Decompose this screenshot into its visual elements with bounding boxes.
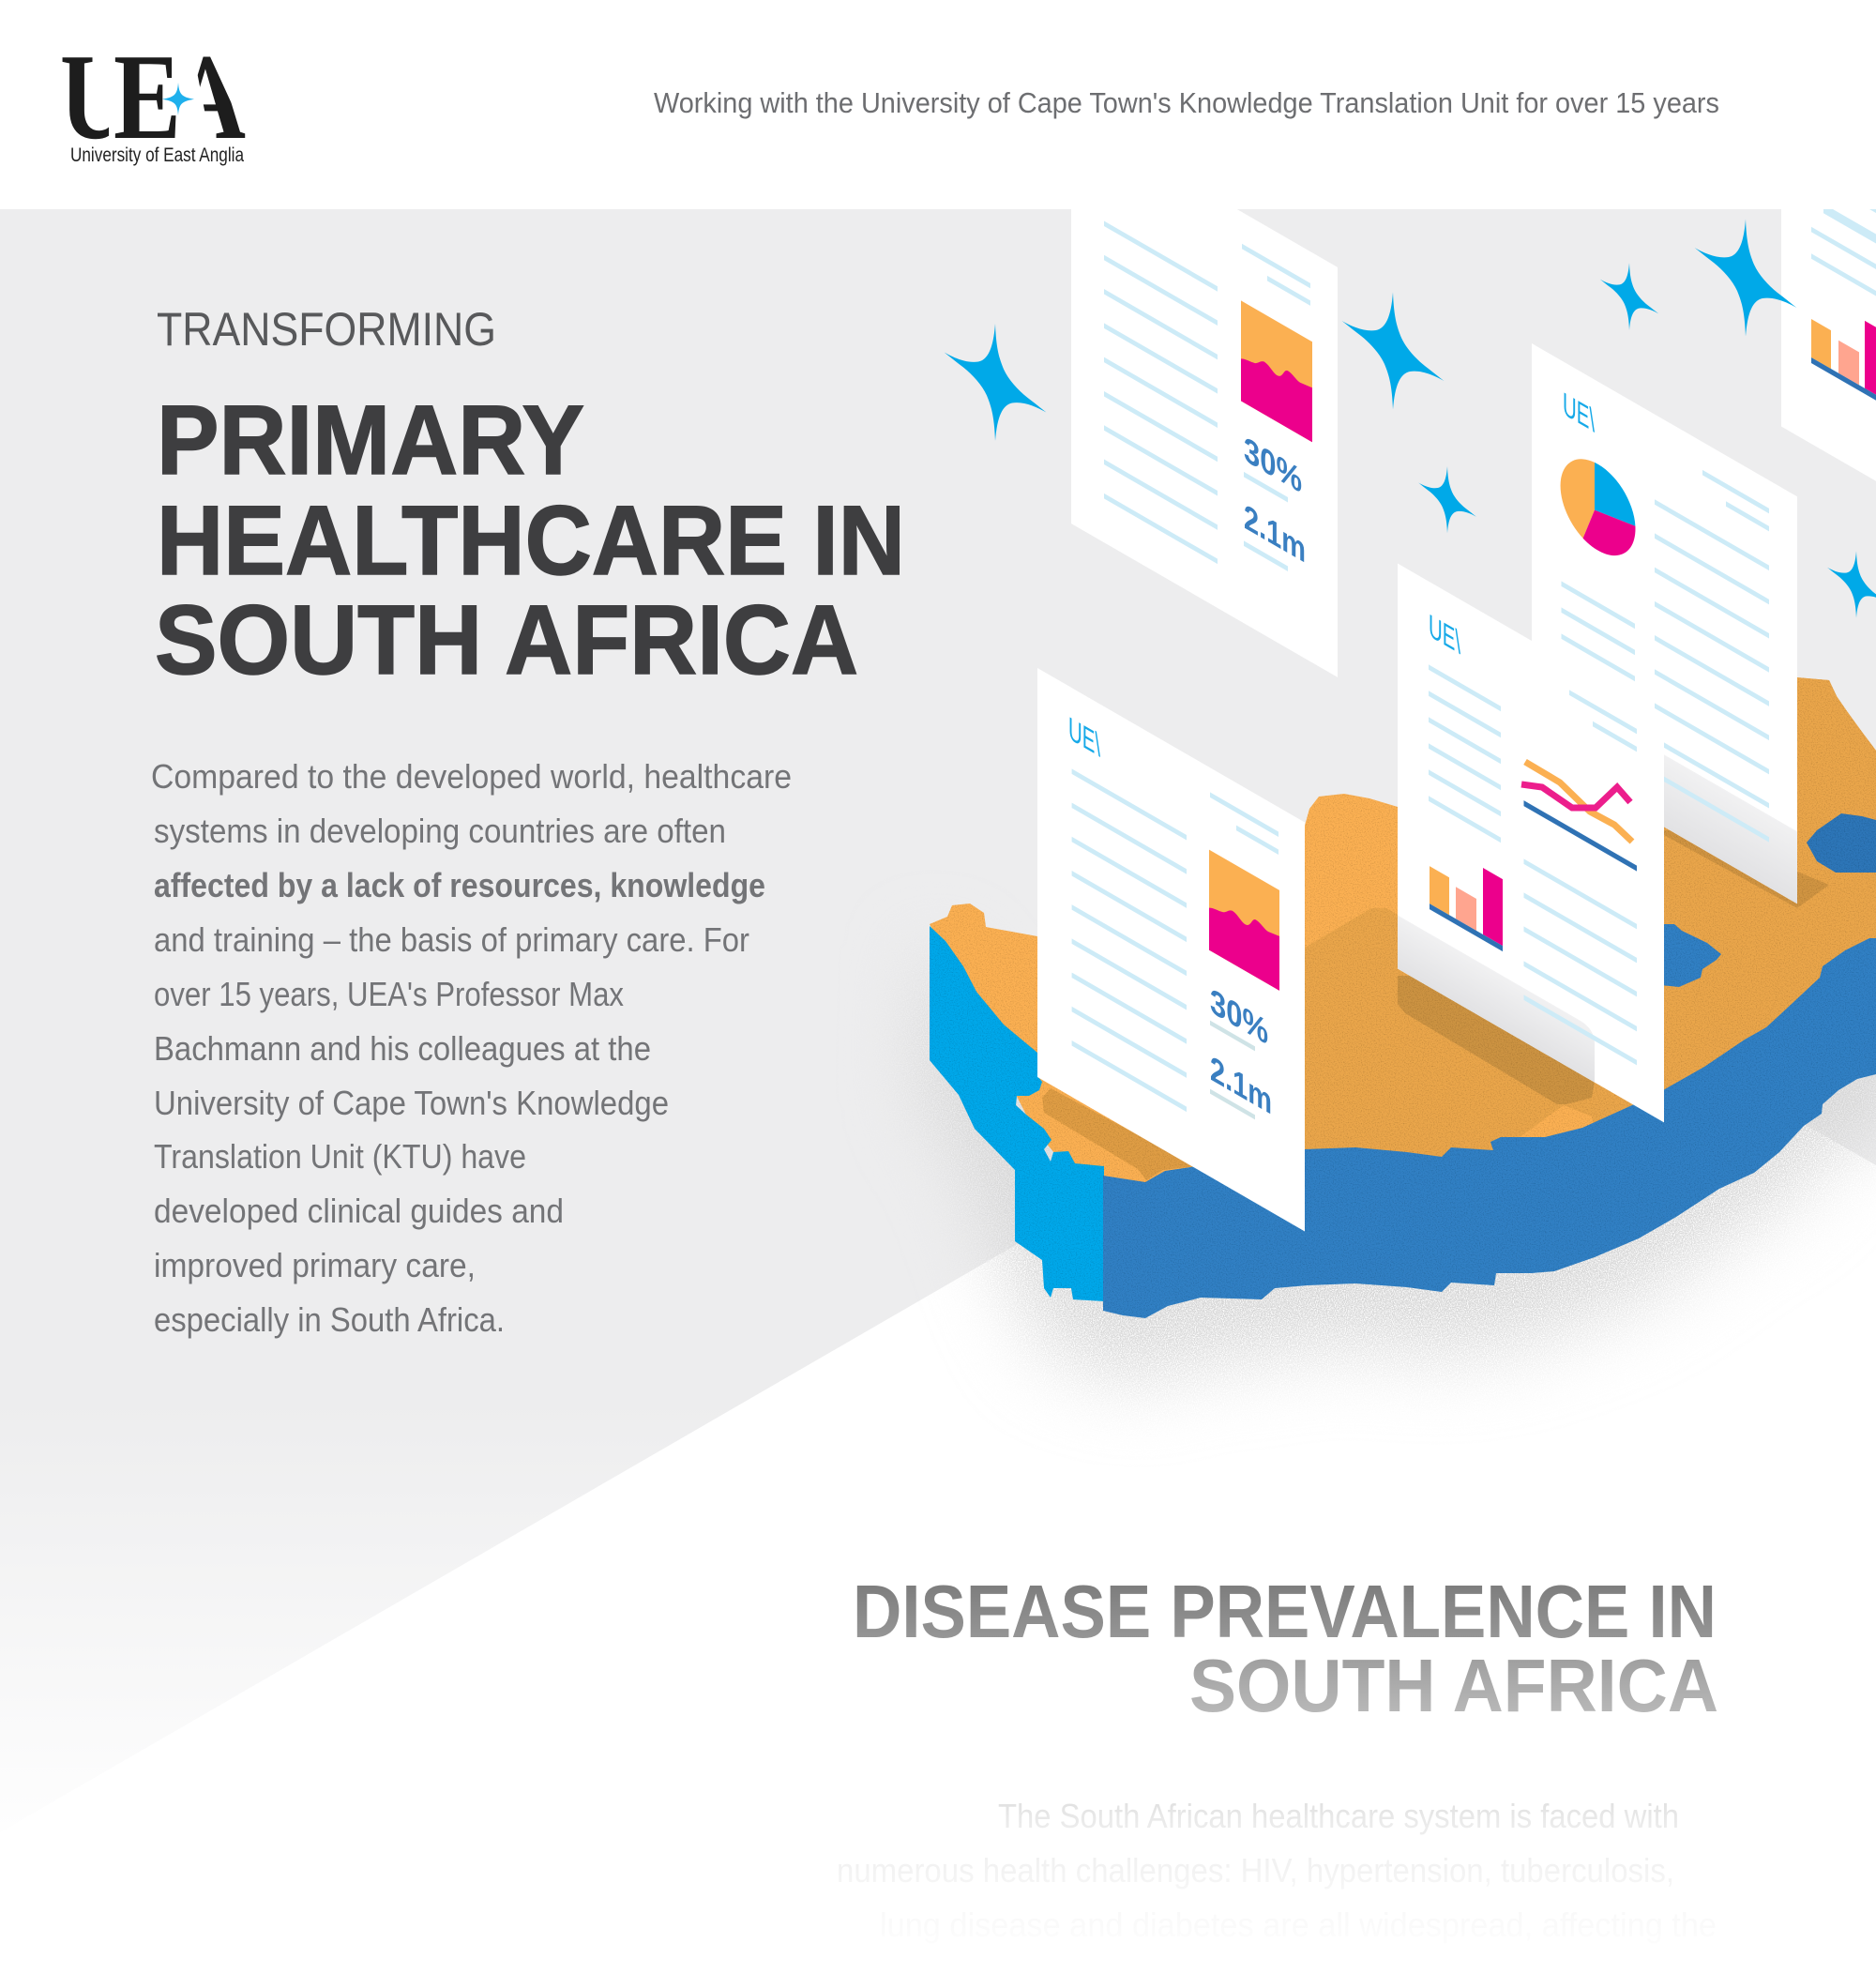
illustration: South Africa map with floating documents: [924, 17, 1876, 1384]
intro paragraph: Compared to the developed world, healthcare: [151, 757, 792, 796]
document: top right corner: [1781, 17, 1876, 580]
intro paragraph: affected by a lack of resources, knowledge: [154, 866, 765, 904]
section intro, fading out: [837, 1797, 1717, 1944]
UEA logo: U: [60, 29, 129, 165]
shadow band under back document: [1664, 830, 1829, 908]
main title: HEALTHCARE IN: [157, 486, 905, 596]
line chart axis: [1523, 800, 1637, 872]
document: front left: UE\: [1068, 709, 1100, 764]
lake: Lesotho: [1660, 924, 1721, 987]
intro paragraph: improved primary care,: [154, 1246, 476, 1284]
section intro, fading out: The South African healthcare system is faced with: [998, 1797, 1679, 1835]
map ground shadow: [924, 938, 1876, 1384]
pie chart: [1561, 443, 1635, 572]
intro paragraph: Translation Unit (KTU) have: [154, 1137, 526, 1176]
intro paragraph: especially in South Africa.: [154, 1300, 505, 1339]
light orange wedge on south coast: [1520, 1105, 1595, 1146]
sparkle stars: [945, 220, 1876, 618]
document: top centre: 30%: [1244, 430, 1302, 501]
document: middle with line and bar charts: UE\: [1429, 607, 1460, 661]
bar chart: [1430, 837, 1503, 951]
document: front left: [1037, 668, 1305, 1231]
UEA logo: E: [113, 29, 181, 165]
map top surface, shaded orange: [1305, 677, 1876, 1182]
main title: [155, 386, 905, 695]
header band: [0, 0, 1876, 209]
section heading: disease prevalence: SOUTH AFRICA: [1189, 1644, 1718, 1727]
shadow band under front document: [1042, 1088, 1197, 1180]
document: right with pie chart: UE\: [1563, 385, 1595, 439]
section intro, fading out: numerous health challenges: HIV, hypertension, tuberculosis,: [837, 1851, 1674, 1890]
main title: PRIMARY: [157, 386, 584, 495]
document: top centre: [1071, 114, 1338, 677]
line chart: pink series: [1521, 784, 1630, 808]
section heading: disease prevalence: [853, 1570, 1718, 1727]
intro paragraph: developed clinical guides and: [154, 1192, 564, 1230]
section intro, fading out: lung disease and diabetes are all widespread, affecting the: [880, 1906, 1717, 1944]
main title: SOUTH AFRICA: [155, 585, 858, 695]
lake: Eswatini: [1807, 813, 1876, 873]
document: front left: 30%: [1210, 981, 1268, 1053]
header tagline: Working with the University of Cape Town's Knowledge Translation Unit for over 15 years: [654, 86, 1719, 119]
intro paragraph: [151, 757, 792, 1339]
intro paragraph: University of Cape Town's Knowledge: [154, 1084, 669, 1122]
UEA logo: [62, 56, 246, 165]
intro paragraph: Bachmann and his colleagues at the: [154, 1029, 651, 1068]
intro paragraph: over 15 years, UEA's Professor Max: [154, 975, 624, 1013]
white isometric floor: [0, 957, 1876, 1974]
map of South Africa: [930, 677, 1876, 1318]
intro paragraph: and training – the basis of primary care. For: [154, 920, 749, 959]
section heading: disease prevalence: DISEASE PREVALENCE IN: [853, 1570, 1717, 1653]
line chart: orange series: [1525, 762, 1632, 842]
document: middle with line and bar charts: [1398, 563, 1664, 1122]
title kicker: TRANSFORMING: [157, 303, 496, 356]
UEA logo: A: [174, 29, 246, 165]
document: right with pie chart: [1532, 343, 1797, 903]
UEA logo: University of East Anglia: [70, 144, 244, 166]
shadow band under middle document: [1398, 976, 1595, 1104]
document: front left: 2.1m: [1210, 1049, 1272, 1123]
map top surface, light orange: [930, 677, 1876, 1210]
map side, bright blue: [930, 926, 1104, 1301]
map side, dark blue: [1103, 938, 1876, 1318]
document: top centre: 2.1m: [1244, 497, 1306, 571]
intro paragraph: systems in developing countries are often: [154, 812, 726, 850]
